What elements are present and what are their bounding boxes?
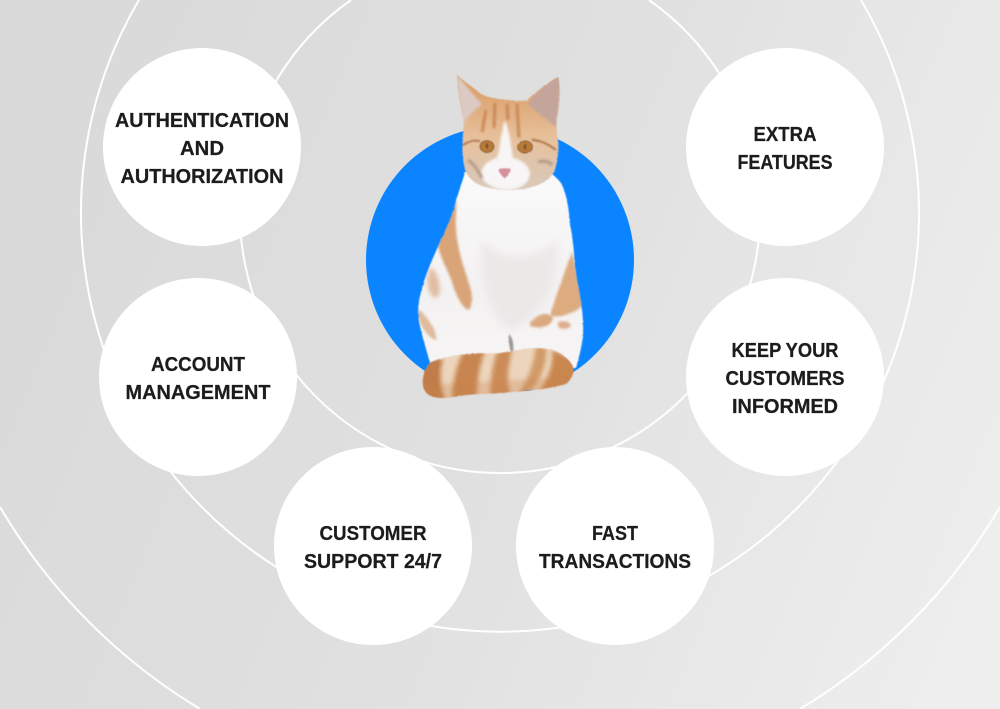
cat nose: [498, 168, 511, 179]
feature: account management: ACCOUNT: [151, 354, 245, 376]
cat illustration: [417, 75, 583, 402]
feature: authentication and authorization: [103, 48, 301, 246]
feature: authentication and authorization: AUTHORIZATION: [120, 166, 284, 188]
feature: fast transactions: [516, 447, 714, 645]
feature: authentication and authorization: AND: [180, 138, 224, 160]
feature: customer support 24/7: CUSTOMER: [320, 523, 427, 545]
forehead stripes: [482, 103, 519, 138]
feature: account management: MANAGEMENT: [126, 382, 270, 404]
white blaze and muzzle: [481, 120, 530, 190]
feature: keep your customers informed: [686, 278, 884, 476]
feature: fast transactions: TRANSACTIONS: [539, 551, 691, 573]
cat tail: [422, 348, 574, 399]
feature: extra features: [686, 48, 884, 246]
right ear: [528, 77, 559, 127]
blue circle behind cat: [366, 126, 634, 394]
feature: extra features: EXTRA: [754, 124, 816, 146]
feature: keep your customers informed: INFORMED: [732, 396, 838, 418]
left ear: [457, 75, 482, 124]
feature: keep your customers informed: KEEP YOUR: [732, 340, 839, 362]
feature: keep your customers informed: CUSTOMERS: [726, 368, 844, 390]
cat eyes: [480, 140, 532, 153]
feature: customer support 24/7: [274, 447, 472, 645]
cat body: [417, 172, 583, 368]
cat head: [457, 75, 560, 190]
feature: authentication and authorization: AUTHENTICATION: [115, 110, 289, 132]
feature: account management: [99, 278, 297, 476]
feature: customer support 24/7: SUPPORT 24/7: [304, 551, 442, 573]
feature: fast transactions: FAST: [592, 523, 638, 545]
feature: extra features: FEATURES: [738, 152, 832, 174]
